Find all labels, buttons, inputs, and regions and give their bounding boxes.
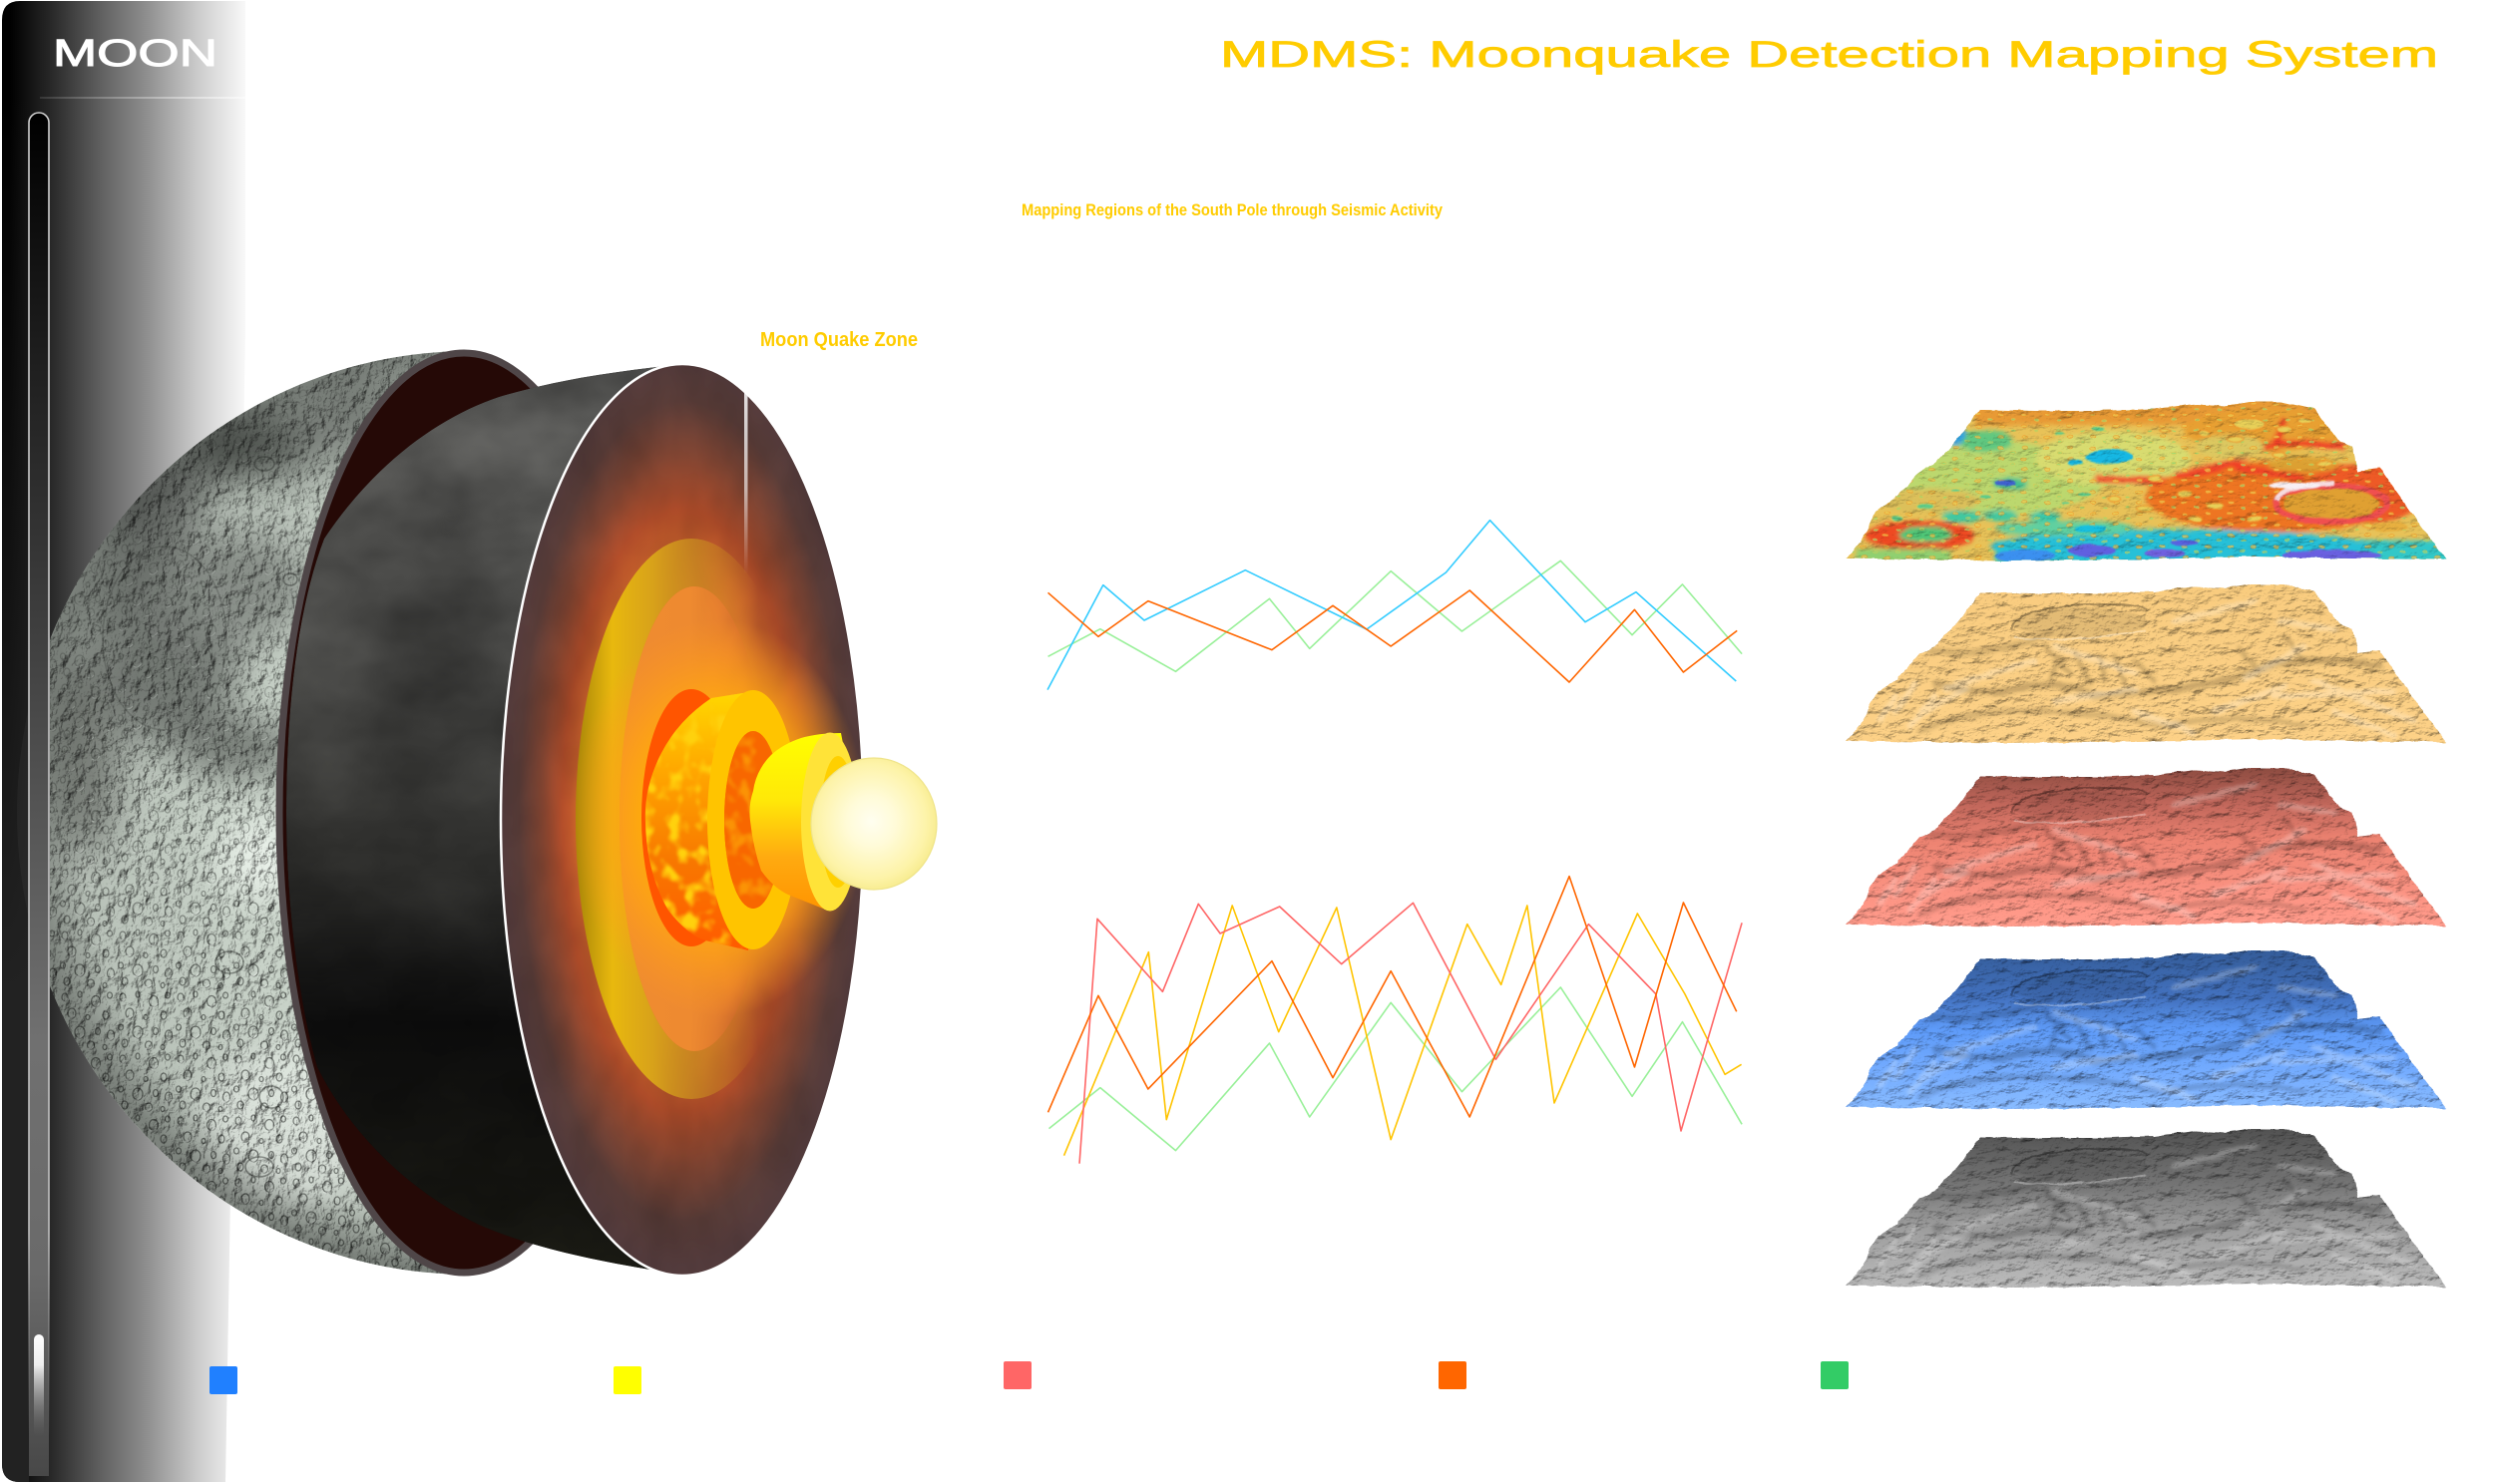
legend swatch: green	[1821, 1361, 1849, 1389]
inner orange layer	[620, 586, 769, 1051]
moon outer surface	[50, 351, 447, 1275]
moon: faint edge behind scrollbar	[17, 351, 921, 1275]
heading: MOON logo: MOON	[53, 33, 217, 75]
solid inner core	[811, 758, 937, 890]
line chart: top seismic traces	[1047, 521, 1742, 690]
title: MDMS: Moonquake Detection Mapping System	[1220, 34, 2438, 75]
legend swatch: orange	[1439, 1361, 1466, 1389]
moon cutaway illustration	[0, 339, 937, 1287]
cut rim and interior shell	[279, 353, 648, 1273]
terrain map: blue relief	[1846, 949, 2446, 1110]
scrollbar thumb	[34, 1334, 44, 1436]
mantle dome	[286, 364, 682, 1275]
terrain map: grey relief	[1846, 1129, 2446, 1289]
terrain map: elevation colour	[1846, 401, 2446, 562]
outer core opening	[641, 689, 741, 946]
inner core shell	[749, 733, 858, 911]
label: moon quake zone: Moon Quake Zone	[760, 329, 918, 351]
legend swatch: red	[1004, 1361, 1032, 1389]
cross-section disc	[501, 364, 864, 1276]
scrollbar track	[29, 113, 49, 1476]
subtitle: Mapping Regions of the South Pole through Seismic Activity	[1022, 200, 1443, 219]
yellow ring	[707, 690, 799, 949]
ring opening lava	[724, 731, 782, 909]
legend swatch: yellow	[614, 1366, 641, 1394]
line chart: bottom seismic traces	[1048, 877, 1742, 1164]
panel: left sidebar gradient	[2, 1, 249, 1482]
core glow	[549, 618, 888, 1017]
terrain map: sand relief	[1846, 584, 2446, 744]
outer core lava body	[645, 691, 768, 950]
terrain map: red relief	[1846, 768, 2446, 928]
inner core ring	[801, 732, 859, 912]
outer molten ring	[576, 539, 807, 1099]
quake line marker	[744, 385, 748, 574]
legend swatch: blue	[209, 1366, 237, 1394]
